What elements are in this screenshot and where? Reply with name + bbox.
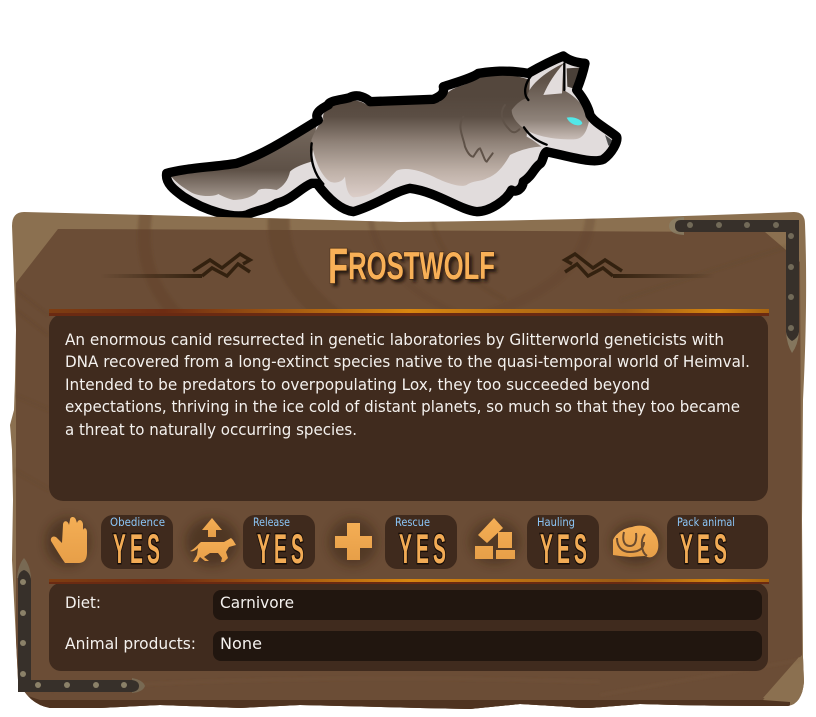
body fur bbox=[311, 74, 542, 197]
ability: release: Release bbox=[253, 515, 290, 529]
row: diet: Diet: bbox=[65, 593, 101, 612]
icon: pack (pack animal) bbox=[611, 522, 661, 564]
row: diet: Carnivore bbox=[220, 593, 294, 612]
tail fur bbox=[170, 123, 317, 200]
description text: expectations, thriving in the ice cold of distant planets, so much so that they too became bbox=[65, 397, 740, 416]
description text bbox=[65, 330, 750, 439]
ability: obedience bbox=[101, 515, 173, 572]
ability: pack animal: YES bbox=[680, 524, 731, 572]
ability: pack animal: Pack animal bbox=[677, 515, 735, 529]
wolf illustration bbox=[166, 56, 617, 216]
divider bar: bottom bbox=[49, 579, 769, 584]
near ear inner bbox=[543, 64, 563, 95]
ability: hauling: Hauling bbox=[537, 515, 575, 529]
metal bracket: bottom left bbox=[17, 558, 145, 693]
bottom right light corner bbox=[763, 657, 804, 698]
title: ROSTWOLF bbox=[348, 245, 495, 288]
description panel bbox=[49, 314, 768, 501]
wood swirls bbox=[138, 214, 596, 232]
icon: hand (obedience) bbox=[46, 517, 90, 566]
ability: release: YES bbox=[257, 524, 308, 572]
inner darker wood bbox=[16, 229, 802, 717]
title ornament: right bbox=[565, 254, 715, 278]
stats panel bbox=[49, 583, 768, 671]
ability: obedience: YES bbox=[113, 524, 164, 572]
eye bbox=[567, 117, 582, 125]
title shadow: ROSTWOLF bbox=[351, 248, 498, 291]
row: animal products: None bbox=[220, 634, 262, 653]
nose bbox=[605, 135, 614, 146]
divider bar: top bbox=[49, 309, 769, 316]
icon: plus (rescue) bbox=[329, 518, 377, 566]
ability: hauling: YES bbox=[540, 524, 591, 572]
description text: An enormous canid resurrected in genetic laboratories by Glitterworld geneticists with bbox=[65, 330, 724, 349]
head fur bbox=[512, 63, 589, 139]
description text: DNA recovered from a long-extinct species native to the quasi-temporal world of Heimval. bbox=[65, 352, 750, 371]
wolf pale silhouette bbox=[166, 56, 617, 216]
title ornament: left bbox=[100, 254, 250, 278]
far ear bbox=[567, 67, 583, 89]
ability: rescue: YES bbox=[399, 524, 450, 572]
row: diet bbox=[65, 590, 762, 620]
wooden panel bbox=[10, 205, 806, 717]
wolf black outline bbox=[166, 56, 617, 216]
ability: obedience: Obedience bbox=[110, 515, 165, 529]
fur marks bbox=[460, 105, 519, 162]
ability: rescue: Rescue bbox=[395, 515, 430, 529]
ability: hauling bbox=[527, 515, 599, 572]
ability: release bbox=[243, 515, 315, 572]
title shadow: F bbox=[331, 241, 351, 297]
icon: wolf with arrow (release) bbox=[186, 518, 238, 566]
description text: Intended to be predators to overpopulating Lox, they too succeeded beyond bbox=[65, 375, 650, 394]
outer wood board bbox=[10, 212, 806, 709]
row: animal products: Animal products: bbox=[65, 634, 196, 653]
icon: boxes (hauling) bbox=[470, 518, 520, 564]
ability: rescue bbox=[385, 515, 457, 572]
ear and jaw lines bbox=[311, 63, 564, 184]
description text: a threat to naturally occurring species. bbox=[65, 420, 357, 439]
metal bracket: top right bbox=[669, 217, 799, 353]
ability: pack animal bbox=[667, 515, 768, 572]
bottom dark edge bbox=[28, 696, 790, 709]
title: F bbox=[328, 238, 348, 294]
row: animal products bbox=[65, 631, 762, 661]
